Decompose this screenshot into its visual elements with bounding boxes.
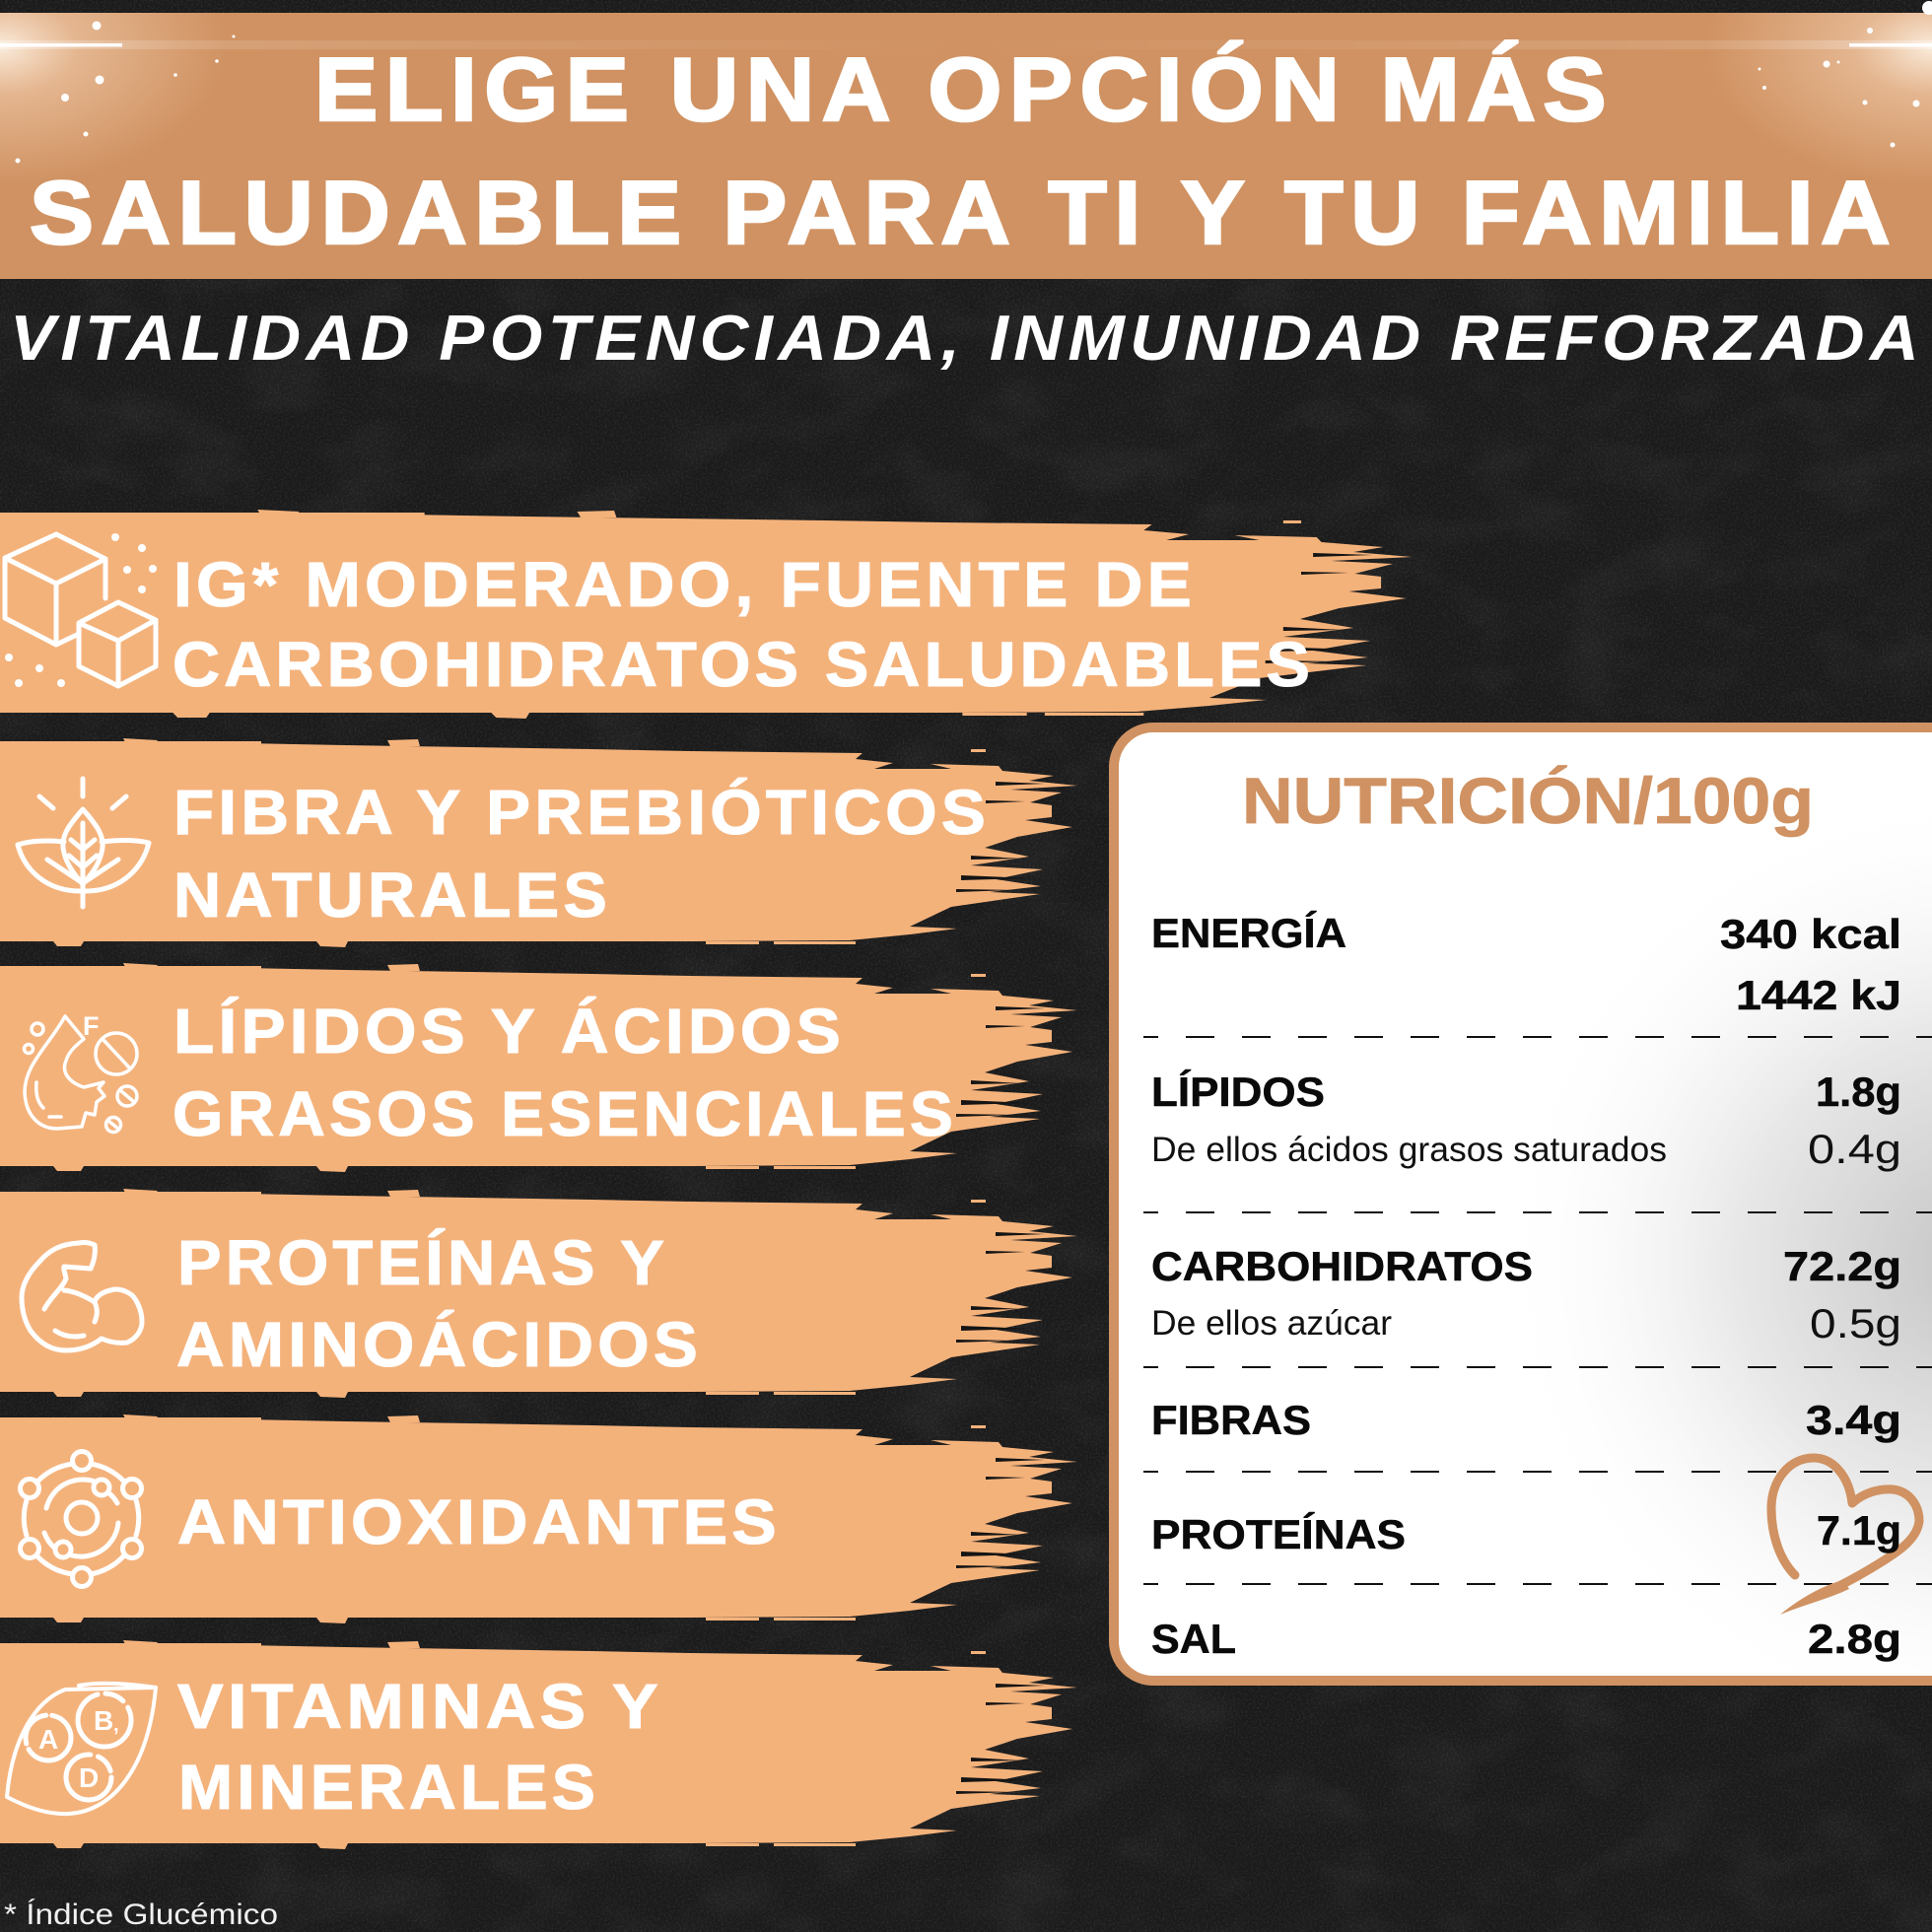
footnote: * Índice Glucémico: [4, 1898, 278, 1931]
text: lipidos: GRASOS ESENCIALES: [172, 1078, 957, 1149]
row: sal: SAL: [1151, 1616, 1236, 1662]
row: energia: [1151, 910, 1901, 1018]
title text: [30, 40, 1898, 263]
icon labels: vitamins: D: [79, 1762, 99, 1793]
row: carbohidratos: De ellos azúcar: [1151, 1304, 1392, 1343]
strip 3: lipidos: [0, 963, 1077, 1172]
title banner: [0, 0, 1932, 279]
title text: SALUDABLE PARA TI Y TU FAMILIA: [30, 164, 1898, 263]
row: energia: 1442 kJ: [1736, 972, 1901, 1018]
row: fibras: 3.4g: [1806, 1397, 1901, 1443]
strip 5: antioxidantes: [0, 1414, 1077, 1623]
text: proteinas: AMINOÁCIDOS: [176, 1309, 702, 1380]
row: proteinas: [1151, 1507, 1901, 1557]
strip 4: proteinas: [0, 1189, 1077, 1398]
row: lipidos: 1.8g: [1816, 1069, 1901, 1115]
text: IG moderado: CARBOHIDRATOS SALUDABLES: [172, 629, 1314, 700]
row: sal: 2.8g: [1808, 1616, 1901, 1662]
icon: vitamins leaf: [7, 1684, 156, 1814]
strip 2: fibra: [0, 738, 1077, 947]
strip 1: IG moderado: [0, 510, 1413, 719]
panel: nutrition table: [1114, 727, 1932, 1735]
text: antioxidantes: ANTIOXIDANTES: [177, 1486, 781, 1557]
table dividers: [1143, 1037, 1932, 1584]
icon label: F: F: [83, 1011, 99, 1041]
icon labels: vitamins: [38, 1705, 119, 1793]
icon: atom: [20, 1451, 142, 1587]
icon labels: vitamins: ,: [113, 1714, 119, 1736]
icon labels: vitamins: B: [94, 1705, 113, 1736]
text: lipidos: [172, 996, 957, 1149]
row: sal: [1151, 1616, 1901, 1662]
nutrition heading: NUTRICIÓN/100g: [1242, 764, 1814, 837]
row: proteinas: PROTEÍNAS: [1151, 1511, 1406, 1557]
text: proteinas: PROTEÍNAS Y: [177, 1227, 668, 1298]
row: lipidos: De ellos ácidos grasos saturados: [1151, 1131, 1667, 1169]
text: vitaminas: VITAMINAS Y: [177, 1671, 662, 1742]
icon: heart: [1771, 1458, 1919, 1615]
subtitle: VITALIDAD POTENCIADA, INMUNIDAD REFORZADA: [10, 302, 1924, 374]
text: fibra: FIBRA Y PREBIÓTICOS: [173, 777, 990, 848]
row: fibras: FIBRAS: [1151, 1397, 1311, 1443]
text: proteinas: [176, 1227, 702, 1380]
text: IG moderado: [172, 549, 1314, 700]
row: fibras: [1151, 1397, 1901, 1443]
row: proteinas: 7.1g: [1817, 1507, 1901, 1553]
text: IG moderado: IG* MODERADO, FUENTE DE: [173, 549, 1196, 620]
row: lipidos: [1151, 1069, 1901, 1172]
strip 6: vitaminas: [0, 1640, 1077, 1849]
row: carbohidratos: 72.2g: [1783, 1243, 1901, 1289]
icon: bicep: [22, 1242, 142, 1350]
row: carbohidratos: [1151, 1243, 1901, 1346]
row: energia: 340 kcal: [1720, 911, 1901, 957]
text: fibra: [173, 777, 990, 931]
row: carbohidratos: CARBOHIDRATOS: [1151, 1243, 1533, 1289]
icon: sugar cubes: [5, 533, 157, 687]
icon: leaves: [18, 779, 149, 907]
icon labels: vitamins: A: [38, 1724, 58, 1755]
title text: ELIGE UNA OPCIÓN MÁS: [314, 40, 1614, 140]
text: lipidos: LÍPIDOS Y ÁCIDOS: [173, 996, 845, 1067]
row: lipidos: LÍPIDOS: [1151, 1069, 1325, 1115]
row: energia: ENERGÍA: [1151, 910, 1346, 956]
text: vitaminas: MINERALES: [178, 1752, 599, 1823]
text: fibra: NATURALES: [173, 860, 611, 931]
icon: fat drop: [24, 1016, 137, 1132]
row: carbohidratos: 0.5g: [1810, 1300, 1901, 1346]
row: lipidos: 0.4g: [1808, 1126, 1901, 1172]
text: vitaminas: [177, 1671, 662, 1823]
